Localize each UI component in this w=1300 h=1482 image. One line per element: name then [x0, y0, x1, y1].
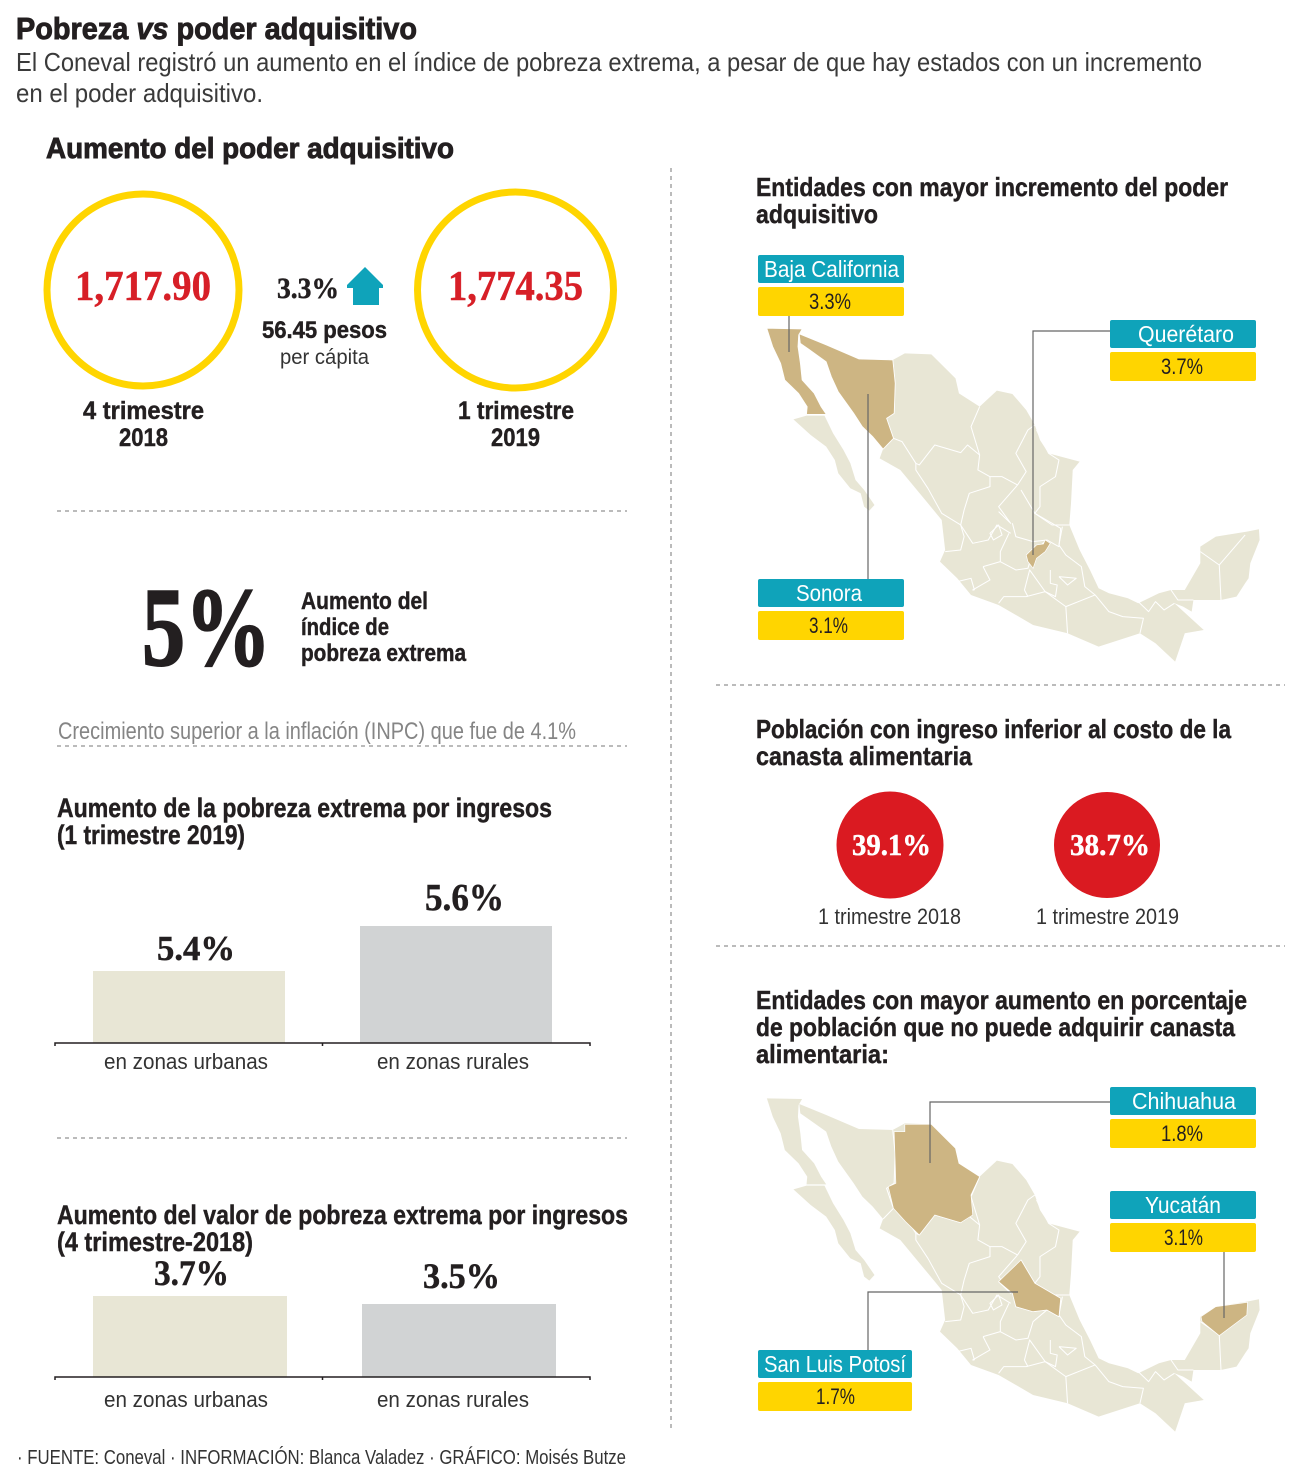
heading: (1 trimestre 2019) [57, 820, 245, 850]
circle 2019: 38.7% [1070, 827, 1150, 862]
panel: mayor incremento [756, 172, 1260, 662]
callout: Yucatán: 3.1% [1164, 1225, 1203, 1250]
inflation note: Crecimiento superior a la inflación (INPC) que fue de 4.1% [58, 718, 576, 745]
heading: adquisitivo [756, 199, 878, 229]
title: Pobreza vs poder adquisitivo [16, 11, 417, 46]
circle 2018 [836, 792, 944, 898]
heading [57, 1200, 628, 1257]
heading: (4 trimestre-2018) [57, 1227, 253, 1257]
increase percentage: 3.3% [277, 272, 339, 305]
heading [57, 793, 552, 850]
subtitle [16, 47, 1202, 108]
heading [756, 172, 1228, 229]
heading: Entidades con mayor aumento en porcentaje [756, 985, 1247, 1015]
panel: bar chart valor pobreza extrema [55, 1200, 628, 1412]
callout: Chihuahua: Chihuahua [1132, 1088, 1236, 1114]
map: Mexico highlighting Chihuahua, San Luis Potosí, Yucatán [767, 1098, 1260, 1432]
circle 2019 [1054, 792, 1160, 898]
callout: Chihuahua: 1.8% [1161, 1121, 1203, 1146]
panel: aumento del poder adquisitivo [46, 133, 614, 452]
label 2019: 1 trimestre 2019 [1036, 904, 1179, 929]
label 2018: 2018 [119, 424, 168, 452]
bar rural [362, 1304, 556, 1377]
label 2018: 4 trimestre [83, 397, 204, 425]
per capita: per cápita [280, 346, 369, 369]
circle 2019 [418, 192, 614, 388]
callout: San Luis Potosí [758, 1350, 912, 1411]
label urban: en zonas urbanas [104, 1387, 268, 1412]
panel: ingreso inferior a canasta [756, 714, 1231, 929]
label rural: en zonas rurales [377, 1387, 529, 1412]
big stat 5%: 5% [142, 566, 271, 690]
callout: Querétaro: 3.7% [1161, 354, 1203, 379]
callout: Baja California: Baja California [764, 256, 899, 282]
circle 2018: 39.1% [852, 827, 931, 862]
heading: Aumento de la pobreza extrema por ingresos [57, 793, 552, 823]
heading: alimentaria: [756, 1039, 889, 1069]
panel: bar chart pobreza extrema [55, 793, 590, 1074]
label 2018 [83, 397, 204, 452]
callout: San Luis Potosí: 1.7% [816, 1384, 855, 1409]
bar urban [93, 971, 285, 1043]
map: Mexico highlighting Baja California, Sonora, Querétaro [767, 328, 1260, 662]
label 2019 [458, 397, 574, 452]
callout: Chihuahua [1110, 1087, 1256, 1148]
callout: Sonora: 3.1% [809, 613, 848, 638]
circle 2018: 1,717.90 [75, 264, 211, 310]
increase pesos: 56.45 pesos [262, 317, 387, 344]
stat description: pobreza extrema [301, 640, 467, 667]
label 2019: 1 trimestre [458, 397, 574, 425]
label 2018: 1 trimestre 2018 [818, 904, 961, 929]
callout: Sonora: Sonora [796, 580, 862, 606]
heading: Entidades con mayor incremento del poder [756, 172, 1228, 202]
label 2019: 2019 [491, 424, 540, 452]
leader lines [789, 316, 1110, 579]
stat description: Aumento del [301, 588, 428, 615]
stat description: índice de [301, 614, 389, 641]
value rural: 3.5% [423, 1256, 500, 1296]
value urban: 5.4% [157, 929, 235, 968]
heading [756, 714, 1231, 771]
label rural: en zonas rurales [377, 1049, 529, 1074]
heading: de población que no puede adquirir canasta [756, 1012, 1235, 1042]
callout: Querétaro: Querétaro [1138, 321, 1234, 347]
source footer: · FUENTE: Coneval · INFORMACIÓN: Blanca Valadez · GRÁFICO: Moisés Butze [17, 1446, 626, 1469]
heading: Aumento del valor de pobreza extrema por ingresos [57, 1200, 628, 1230]
callout: Baja California: 3.3% [809, 289, 851, 314]
subtitle: en el poder adquisitivo. [16, 78, 263, 108]
callout: Baja California [758, 255, 904, 316]
value urban: 3.7% [154, 1253, 229, 1293]
heading: canasta alimentaria [756, 741, 972, 771]
bar urban [93, 1296, 287, 1377]
heading: Población con ingreso inferior al costo de la [756, 714, 1231, 744]
label urban: en zonas urbanas [104, 1049, 268, 1074]
icon: up arrow [347, 267, 383, 305]
callout: Yucatán: Yucatán [1145, 1192, 1221, 1218]
value rural: 5.6% [425, 877, 504, 919]
heading [756, 985, 1247, 1069]
stat description [301, 588, 467, 667]
callout: Querétaro [1110, 320, 1256, 381]
callout: Sonora [758, 579, 904, 640]
panel: mayor aumento canasta [756, 985, 1260, 1432]
circle 2018 [47, 194, 239, 386]
callout: San Luis Potosí: San Luis Potosí [764, 1351, 907, 1377]
bar rural [360, 926, 552, 1043]
heading: Aumento del poder adquisitivo [46, 133, 454, 165]
callout: Yucatán [1110, 1191, 1256, 1252]
subtitle: El Coneval registró un aumento en el índice de pobreza extrema, a pesar de que hay estados con un incremento [16, 47, 1202, 77]
circle 2019: 1,774.35 [448, 264, 583, 310]
leader lines [868, 1102, 1224, 1350]
